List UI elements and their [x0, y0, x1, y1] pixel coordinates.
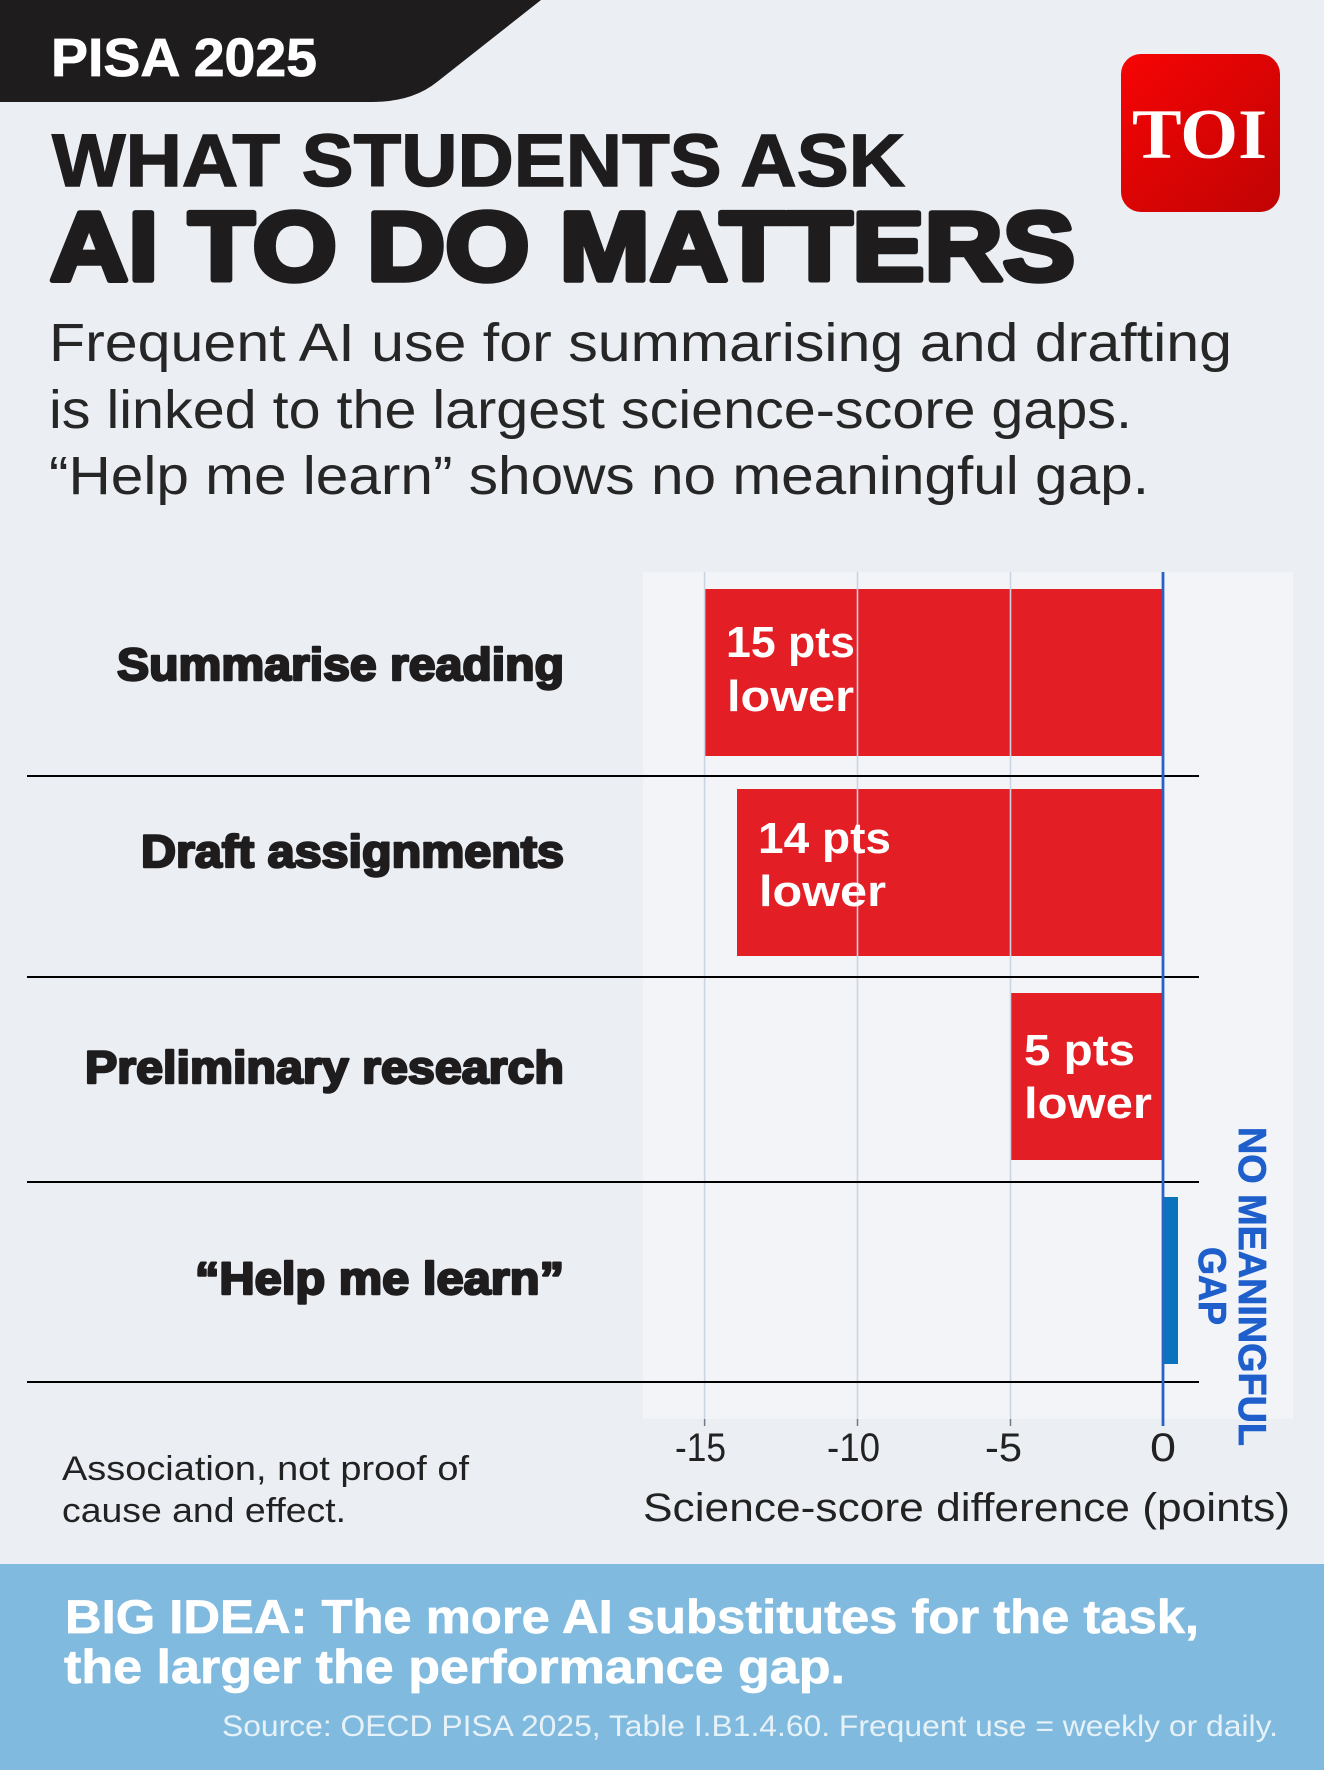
bar value labels: 15 pts [726, 618, 855, 667]
bar chart [27, 572, 1293, 1530]
header tab [0, 0, 541, 102]
caveat note [62, 1450, 470, 1530]
row labels: “Help me learn” [195, 1253, 564, 1304]
big idea text: the larger the performance gap. [64, 1640, 845, 1693]
bar: help me learn [1163, 1197, 1178, 1364]
bar value labels [726, 618, 1152, 1128]
icon: TOI logo [1121, 54, 1280, 212]
subtitle text: Frequent AI use for summarising and drafting [49, 313, 1232, 373]
plot background [643, 572, 1293, 1419]
bar value labels: 14 pts [758, 814, 891, 863]
bar value labels: lower [727, 672, 854, 721]
bar value labels: lower [1024, 1079, 1152, 1128]
x-axis tick labels: -5 [985, 1426, 1022, 1470]
bar: draft assignments [737, 789, 1163, 956]
zero line [1162, 572, 1164, 1426]
no meaningful gap annotation: GAP [1190, 1247, 1233, 1325]
x-axis tick labels: 0 [1150, 1426, 1176, 1470]
row labels [85, 639, 564, 1304]
caveat note: Association, not proof of [62, 1450, 470, 1488]
big idea text: BIG IDEA: The more AI substitutes for the task, [65, 1590, 1199, 1643]
row labels: Draft assignments [141, 826, 564, 877]
x-axis tick labels: -15 [675, 1426, 726, 1470]
bar: summarise reading [705, 589, 1163, 756]
title [50, 119, 1075, 301]
icon: TOI logo: TOI [1132, 96, 1267, 174]
panel: big idea footer [0, 1564, 1324, 1770]
row labels: Summarise reading [117, 639, 564, 690]
caveat note: cause and effect. [62, 1492, 346, 1530]
x-axis tick labels: -10 [827, 1426, 880, 1470]
tab label: PISA 2025 [51, 28, 317, 88]
x-axis title: Science-score difference (points) [643, 1486, 1290, 1530]
subtitle text: is linked to the largest science-score gaps. [49, 380, 1132, 440]
x-axis tick labels [675, 1426, 1176, 1470]
subtitle text: “Help me learn” shows no meaningful gap. [49, 446, 1149, 506]
title: AI TO DO MATTERS [50, 192, 1075, 301]
title: WHAT STUDENTS ASK [52, 119, 905, 202]
no meaningful gap annotation: NO MEANINGFUL [1230, 1127, 1273, 1446]
big idea text [64, 1590, 1199, 1693]
subtitle text [49, 313, 1232, 506]
source line: Source: OECD PISA 2025, Table I.B1.4.60. Frequent use = weekly or daily. [222, 1710, 1278, 1743]
bar value labels: lower [759, 867, 886, 916]
no meaningful gap annotation [1190, 1127, 1273, 1446]
row labels: Preliminary research [85, 1042, 564, 1093]
bar: preliminary research [1011, 993, 1163, 1160]
bar value labels: 5 pts [1024, 1026, 1135, 1075]
